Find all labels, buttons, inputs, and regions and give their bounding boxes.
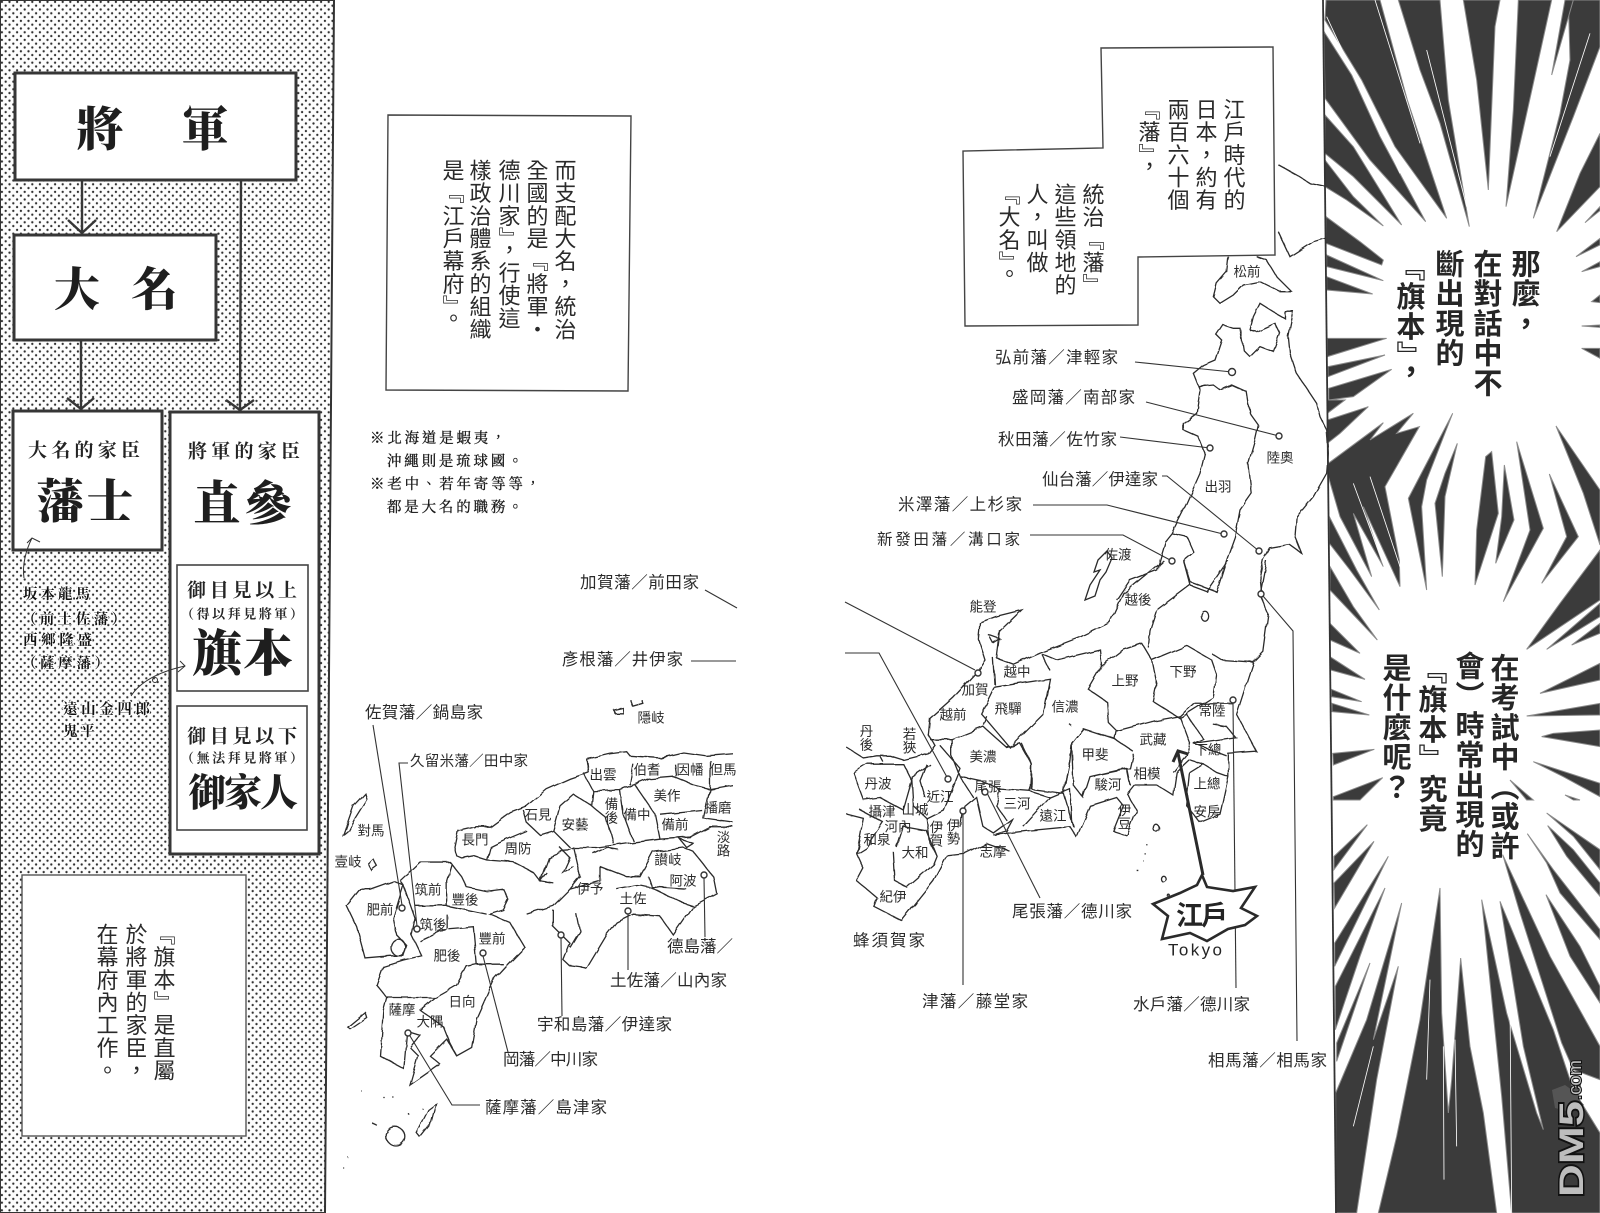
map labels: provinces: 安房 xyxy=(1194,804,1220,820)
annotation: hatamoto examples: 鬼平 xyxy=(63,722,96,740)
text box: hatamoto definition: 『旗本』是直屬 xyxy=(150,923,176,1082)
map labels: provinces: 大隅 xyxy=(416,1014,444,1030)
map labels: provinces: 攝津 xyxy=(868,804,896,820)
panel: gokenin sub-box: 家 xyxy=(224,772,262,815)
map labels: provinces: 紀伊 xyxy=(880,890,906,904)
map labels: provinces xyxy=(334,264,1294,1030)
labels: domains and clans: 米澤藩／上杉家 xyxy=(898,495,1022,514)
map labels: provinces: 加賀 xyxy=(962,682,988,698)
divider: burst panel left edge xyxy=(1323,0,1336,1213)
text box: hatamoto definition xyxy=(22,875,246,1136)
text box: han and daimyo explanation: 人，叫做 xyxy=(1024,183,1048,274)
labels: domains and clans: 佐賀藩／鍋島家 xyxy=(365,703,483,722)
labels: domains and clans xyxy=(365,348,1327,1117)
arrow: examples to han samurai xyxy=(23,538,40,578)
panel: shogun box: 軍 xyxy=(182,105,228,157)
map labels: provinces: 武藏 xyxy=(1140,732,1167,748)
map labels: provinces: 山城 xyxy=(902,802,929,818)
map labels: provinces: 相模 xyxy=(1134,766,1160,782)
panel: daimyo retainers box: 大名的家臣 xyxy=(28,438,140,462)
panel: gokenin sub-box: 御 xyxy=(188,773,226,815)
text: burst question part two: 在考試中（或許 xyxy=(1486,653,1520,861)
map labels: provinces: 下野 xyxy=(1170,664,1197,680)
text box: han and daimyo explanation: 『藩』， xyxy=(1136,98,1160,178)
panel: gokenin sub-box xyxy=(177,706,307,830)
map labels: provinces: 薩摩 xyxy=(388,1002,416,1018)
panel: daimyo retainers box xyxy=(13,411,162,550)
map labels: provinces: 筑後 xyxy=(420,916,446,932)
watermark: DM5.com xyxy=(1552,1060,1591,1197)
text box: han and daimyo explanation: 這些領地的 xyxy=(1052,183,1076,296)
labels: domains and clans: 盛岡藩／南部家 xyxy=(1012,388,1135,407)
icon: Edo burst label: Tokyo xyxy=(1168,940,1222,960)
labels: domains and clans: 津藩／藤堂家 xyxy=(922,992,1028,1011)
map labels: provinces: 筑前 xyxy=(414,882,442,898)
text: burst question part one: 那麼， xyxy=(1507,249,1540,338)
labels: domains and clans: 秋田藩／佐竹家 xyxy=(998,430,1117,449)
map labels: provinces: 日向 xyxy=(448,994,476,1010)
map labels: provinces: 肥前 xyxy=(366,902,394,918)
text box: han and daimyo explanation: 兩百六十個 xyxy=(1164,98,1190,212)
map labels: provinces: 讃岐 xyxy=(654,852,682,868)
text: burst question part two: 『旗本』究竟 xyxy=(1414,655,1448,833)
map labels: provinces: 下總 xyxy=(1194,742,1222,758)
text: burst question part one: 『旗本』， xyxy=(1392,252,1426,386)
arrow: shogun to direct retainers xyxy=(226,180,254,410)
map labels: provinces: 出羽 xyxy=(1204,480,1232,494)
map labels: provinces: 伊賀 xyxy=(928,820,943,847)
map labels: provinces: 松前 xyxy=(1234,264,1260,280)
panel: speed-line burst background xyxy=(1324,0,1600,1213)
text: burst question part one xyxy=(1392,249,1540,398)
map: Sado island xyxy=(1085,551,1112,600)
panel: daimyo retainers box: 藩 xyxy=(36,477,86,529)
map labels: provinces: 能登 xyxy=(970,600,997,614)
labels: domains and clans: 蜂須賀家 xyxy=(853,931,925,950)
footnotes: ※北海道是蝦夷， xyxy=(370,429,508,447)
map labels: provinces: 大和 xyxy=(902,846,928,860)
text box: Edo shogunate explanation: 而支配大名，統治 xyxy=(552,159,576,341)
text: burst question part two: 會）時常出現的 xyxy=(1451,651,1484,859)
text box: hatamoto definition: 在幕府內工作。 xyxy=(94,923,118,1082)
map labels: provinces: 土佐 xyxy=(620,892,646,906)
map labels: provinces: 近江 xyxy=(926,790,954,804)
map labels: provinces: 出雲 xyxy=(590,768,616,782)
panel: gokenin sub-box: 御目見以下 xyxy=(187,726,298,748)
map labels: provinces: 丹波 xyxy=(864,776,892,792)
panel: daimyo box: 名 xyxy=(131,264,177,316)
map labels: provinces: 伊勢 xyxy=(944,818,960,845)
text box: Edo shogunate explanation: 全國的是『將軍・ xyxy=(524,159,548,341)
map labels: provinces: 但馬 xyxy=(710,762,736,778)
map labels: provinces: 長門 xyxy=(462,832,488,848)
panel: daimyo box: 大 xyxy=(54,264,100,316)
map labels: provinces: 佐渡 xyxy=(1104,548,1132,562)
annotation: han samurai examples xyxy=(22,585,126,672)
text box: Edo shogunate explanation: 德川家』，行使這 xyxy=(496,159,520,330)
panel: daimyo box xyxy=(14,235,216,340)
panel: shogun retainers box xyxy=(170,412,319,854)
map labels: provinces: 安藝 xyxy=(562,818,588,832)
map labels: provinces: 甲斐 xyxy=(1082,748,1108,762)
footnotes: 都是大名的職務。 xyxy=(387,499,525,516)
map labels: provinces: 上總 xyxy=(1194,776,1220,792)
labels: domains and clans: 水戶藩／德川家 xyxy=(1133,995,1250,1014)
annotation: hatamoto examples: 遠山金四郎 xyxy=(63,700,150,718)
map labels: provinces: 越中 xyxy=(1004,664,1030,680)
map labels: provinces: 淡路 xyxy=(714,830,730,857)
map: central Japan xyxy=(847,560,1268,920)
map labels: provinces: 河內 xyxy=(884,820,912,834)
watermark: DM5.com: DM5 xyxy=(1553,1101,1591,1197)
labels: domains and clans: 岡藩／中川家 xyxy=(503,1050,598,1069)
map labels: provinces: 志摩 xyxy=(980,844,1006,860)
icon: Edo burst label xyxy=(1153,875,1257,960)
labels: domains and clans: 尾張藩／德川家 xyxy=(1012,902,1132,921)
map labels: provinces: 伊予 xyxy=(576,882,604,896)
text box: Edo shogunate explanation: 樣政治體系的組織 xyxy=(466,159,492,341)
map labels: provinces: 尾張 xyxy=(974,780,1002,794)
text box: Edo shogunate explanation xyxy=(386,115,631,391)
labels: domains and clans: 仙台藩／伊達家 xyxy=(1042,470,1158,489)
panel: shogun box: 將 xyxy=(76,105,124,157)
text box: han and daimyo explanation: 『大名』。 xyxy=(996,183,1020,286)
map labels: provinces: 對馬 xyxy=(358,824,384,838)
map labels: provinces: 信濃 xyxy=(1052,700,1079,714)
panel: shogun retainers box: 將軍的家臣 xyxy=(188,440,300,462)
map labels: provinces: 肥後 xyxy=(434,948,460,964)
map labels: provinces: 若狹 xyxy=(900,726,916,755)
text: burst question part one: 斷出現的 xyxy=(1431,249,1464,368)
map labels: provinces: 陸奧 xyxy=(1266,450,1294,466)
labels: domains and clans: 加賀藩／前田家 xyxy=(580,573,699,592)
map labels: provinces: 備前 xyxy=(662,816,688,832)
labels: domains and clans: 久留米藩／田中家 xyxy=(410,753,528,770)
map labels: provinces: 伊豆 xyxy=(1116,803,1131,830)
footnotes: ※老中、若年寄等等， xyxy=(370,475,543,493)
panel: dotted hierarchy background xyxy=(0,0,334,1213)
map labels: provinces: 壹岐 xyxy=(334,854,362,870)
map labels: provinces: 周防 xyxy=(504,842,532,856)
map labels: provinces: 播磨 xyxy=(704,800,732,816)
arrow: Edo pointer xyxy=(1173,751,1203,875)
text: burst question part two: 是什麼呢？ xyxy=(1378,653,1412,802)
annotation: han samurai examples: 西鄉隆盛 xyxy=(23,631,92,649)
map labels: provinces: 阿波 xyxy=(670,874,697,888)
map labels: provinces: 越前 xyxy=(940,706,966,722)
text box: hatamoto definition: 於將軍的家臣， xyxy=(122,923,148,1082)
map labels: provinces: 駿河 xyxy=(1094,776,1122,792)
labels: domains and clans: 新發田藩／溝口家 xyxy=(877,530,1020,548)
map: western Japan xyxy=(343,693,733,1168)
panel: gokenin sub-box: （無法拜見將軍） xyxy=(181,750,303,766)
text box: Edo shogunate explanation: 是『江戶幕府』。 xyxy=(440,159,464,330)
text box: han and daimyo explanation xyxy=(963,47,1275,326)
arrow: examples to hatamoto xyxy=(131,661,185,696)
labels: domains and clans: 宇和島藩／伊達家 xyxy=(537,1015,672,1034)
map labels: provinces: 隱岐 xyxy=(638,710,665,726)
watermark: DM5.com: .com xyxy=(1565,1060,1585,1100)
map labels: provinces: 丹後 xyxy=(858,724,873,751)
map labels: provinces: 美作 xyxy=(654,788,680,804)
panel: daimyo retainers box: 士 xyxy=(86,477,134,529)
labels: domains and clans: 弘前藩／津輕家 xyxy=(995,348,1118,367)
panel: hatamoto sub-box xyxy=(177,565,308,691)
labels: domains and clans: 土佐藩／山內家 xyxy=(610,971,727,990)
arrow: shogun to daimyo xyxy=(68,180,96,233)
panel: shogun box xyxy=(15,73,296,180)
map labels: provinces: 遠江 xyxy=(1040,808,1066,824)
panel: hatamoto sub-box: （得以拜見將軍） xyxy=(181,606,303,622)
annotation: han samurai examples: （前土佐藩） xyxy=(22,610,126,628)
leader lines: domains xyxy=(373,362,1297,1105)
labels: domains and clans: 相馬藩／相馬家 xyxy=(1208,1051,1327,1070)
text: burst question part two xyxy=(1378,651,1520,861)
text: burst question part one: 在對話中不 xyxy=(1469,249,1502,398)
labels: domains and clans: 薩摩藩／島津家 xyxy=(485,1098,607,1117)
panel: shogun retainers box: 參 xyxy=(244,479,294,531)
labels: domains and clans: 德島藩／ xyxy=(667,937,733,956)
map labels: provinces: 三河 xyxy=(1004,796,1031,812)
panel: hatamoto sub-box: 旗 xyxy=(192,626,245,682)
map labels: provinces: 和泉 xyxy=(864,832,891,848)
map labels: provinces: 備後 xyxy=(602,797,618,824)
map labels: provinces: 備中 xyxy=(624,808,650,822)
icon: Edo burst label: 江戶 xyxy=(1176,901,1228,931)
panel: hatamoto sub-box: 本 xyxy=(243,626,293,682)
text box: han and daimyo explanation: 江戶時代的 xyxy=(1220,98,1246,212)
panel: hatamoto sub-box: 御目見以上 xyxy=(187,580,297,602)
map labels: provinces: 石見 xyxy=(524,808,552,822)
map labels: provinces: 伯耆 xyxy=(634,762,660,778)
panel: gokenin sub-box: 人 xyxy=(260,773,298,815)
labels: domains and clans: 彥根藩／井伊家 xyxy=(562,650,683,669)
map labels: provinces: 上野 xyxy=(1112,674,1139,688)
footnotes: 沖繩則是琉球國。 xyxy=(387,453,525,470)
text box: han and daimyo explanation: 統治『藩』 xyxy=(1080,183,1104,296)
footnotes xyxy=(370,429,543,516)
arrow: daimyo to han samurai xyxy=(67,340,94,410)
map labels: provinces: 豐後 xyxy=(452,892,478,908)
annotation: han samurai examples: （薩摩藩） xyxy=(22,654,109,672)
map labels: provinces: 美濃 xyxy=(970,750,997,764)
map labels: provinces: 常陸 xyxy=(1198,704,1226,718)
annotation: hatamoto examples xyxy=(63,700,150,740)
map labels: provinces: 豐前 xyxy=(478,930,506,946)
text box: han and daimyo explanation: 日本，約有 xyxy=(1192,98,1218,212)
map: northern Honshu xyxy=(1117,165,1328,600)
map labels: provinces: 因幡 xyxy=(676,762,704,778)
annotation: han samurai examples: 坂本龍馬 xyxy=(23,585,90,603)
panel: shogun retainers box: 直 xyxy=(194,479,240,531)
map labels: provinces: 飛驒 xyxy=(994,702,1022,716)
map labels: provinces: 越後 xyxy=(1124,592,1152,608)
